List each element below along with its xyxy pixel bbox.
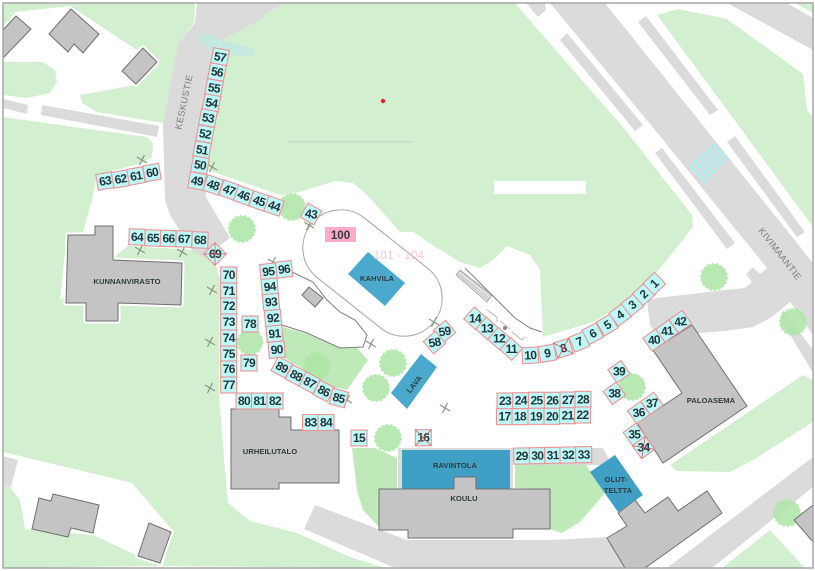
stall row 83-84	[302, 414, 334, 430]
stall 13: 13	[481, 322, 494, 336]
stall column 70-77	[221, 267, 237, 393]
stall 94: 94	[263, 279, 277, 294]
road name: Kivimaantie: KIVIMAANTIE	[756, 226, 804, 282]
tent: Olut-teltta: TELTTA	[604, 486, 633, 495]
stall 88: 88	[287, 367, 305, 385]
houses bottom left	[32, 494, 171, 563]
stall 2	[632, 283, 655, 306]
stall 26: 26	[546, 393, 559, 407]
stall 12: 12	[493, 332, 506, 346]
light posts	[135, 155, 450, 413]
pond	[198, 32, 255, 56]
stall 79: 79	[243, 356, 256, 370]
stall 49: 49	[190, 173, 205, 189]
stall 3: 3	[626, 297, 640, 312]
stall 90: 90	[270, 342, 284, 357]
stall 37: 37	[645, 396, 660, 411]
stall 9	[538, 344, 557, 363]
stall 43	[300, 202, 323, 226]
stall 96: 96	[277, 262, 292, 277]
stall 18: 18	[514, 410, 527, 424]
crossed stall 34: 34	[638, 440, 650, 454]
stall 100: 100	[331, 230, 350, 242]
building: Urheilutalo: URHEILUTALO	[243, 447, 297, 456]
stall 76: 76	[223, 362, 236, 376]
building: Koulu	[379, 477, 550, 538]
tent: Ravintola	[402, 450, 510, 490]
stall row 57-49	[188, 48, 229, 190]
stall 43: 43	[304, 206, 319, 222]
building: Kunnanvirasto: KUNNANVIRASTO	[93, 277, 161, 286]
stall 57: 57	[213, 49, 228, 65]
stall 93: 93	[264, 294, 279, 309]
stalls 78-79	[241, 316, 258, 371]
bench stand	[456, 270, 492, 302]
stall row 48-44	[203, 175, 284, 216]
stall 77: 77	[223, 378, 236, 392]
stall row 40-42	[642, 309, 694, 353]
stall 61: 61	[129, 168, 144, 184]
stall 22: 22	[577, 408, 589, 422]
stall 21: 21	[562, 409, 574, 423]
stall 66: 66	[162, 231, 176, 246]
stall 71: 71	[223, 284, 236, 298]
stall 33: 33	[578, 448, 591, 462]
stall 70: 70	[223, 268, 236, 282]
stall 4: 4	[613, 307, 627, 322]
stall 52: 52	[198, 126, 213, 142]
stall 2: 2	[637, 286, 651, 302]
stall 59: 59	[437, 323, 453, 339]
stall row 14-11	[462, 305, 525, 362]
stall 56	[208, 63, 226, 81]
stall 63: 63	[98, 173, 113, 189]
stall row 64-68	[129, 229, 208, 248]
stall 82: 82	[269, 394, 282, 408]
stall 30: 30	[531, 449, 544, 463]
stall 64: 64	[131, 230, 144, 244]
stall 28: 28	[577, 392, 590, 406]
tent: Olut-teltta	[590, 455, 643, 512]
stall 87: 87	[301, 374, 319, 392]
stall 67: 67	[178, 232, 191, 246]
stall 36: 36	[632, 405, 646, 420]
tent: Ravintola: RAVINTOLA	[433, 461, 477, 470]
stall 38: 38	[608, 386, 621, 400]
stall 85: 85	[331, 390, 347, 407]
building: Paloasema	[637, 325, 747, 463]
stall 44: 44	[266, 197, 283, 215]
stall row 80-82	[236, 393, 283, 409]
crossed stall 16	[415, 430, 431, 446]
stall 20: 20	[546, 409, 559, 423]
stall 68: 68	[194, 233, 207, 247]
stall 80: 80	[238, 394, 251, 408]
stall 5: 5	[601, 317, 614, 333]
house halos	[3, 16, 182, 563]
crossed stall 16: 16	[417, 431, 430, 445]
stall 55	[205, 79, 223, 97]
stall 42: 42	[674, 314, 688, 329]
stalls 59-58	[422, 318, 458, 355]
stall 15: 15	[353, 431, 366, 445]
stall 45: 45	[251, 192, 268, 210]
stall 92: 92	[266, 310, 281, 325]
stall 89: 89	[273, 358, 291, 377]
field marker	[288, 99, 412, 142]
crossed stall 8: 8	[558, 340, 569, 356]
houses top left	[3, 9, 157, 84]
stall row 89-85	[271, 357, 348, 408]
stall 10	[522, 347, 539, 364]
building: Urheilutalo	[231, 409, 339, 489]
stall 41: 41	[660, 323, 675, 339]
stall 7: 7	[574, 334, 586, 349]
stall 35: 35	[628, 427, 641, 441]
stall 15	[351, 430, 367, 446]
stall 9: 9	[543, 346, 552, 361]
stall 84: 84	[320, 416, 333, 430]
stall 3	[621, 294, 644, 316]
stall 55: 55	[207, 80, 222, 96]
stall 31: 31	[547, 448, 560, 462]
stall curve 10-1	[522, 272, 666, 364]
stall 40: 40	[647, 332, 662, 348]
crossed stall 8	[553, 338, 573, 358]
stall 50	[191, 156, 209, 174]
tent: Olut-teltta: OLUT-	[604, 475, 628, 484]
stalls 36-37	[626, 390, 665, 426]
stall 17: 17	[499, 410, 511, 424]
stall 57	[211, 48, 229, 66]
stall row 63-60	[96, 163, 161, 190]
building: Paloasema: PALOASEMA	[687, 396, 736, 405]
stage: Lava	[391, 354, 437, 409]
stall row 29-33	[514, 447, 592, 464]
stall 23: 23	[499, 394, 512, 408]
stall 6: 6	[587, 326, 600, 341]
building: Kunnanvirasto	[66, 226, 182, 321]
building: bottom right	[607, 491, 722, 568]
stall 24: 24	[515, 394, 528, 408]
path outline	[282, 272, 367, 348]
racetrack	[302, 209, 443, 337]
stall 81: 81	[254, 394, 266, 408]
stall 27: 27	[562, 393, 575, 407]
crossed stall 69	[202, 241, 229, 267]
stall 14: 14	[469, 311, 482, 325]
stall 100	[325, 227, 356, 242]
stall 65: 65	[147, 231, 160, 245]
stall 48: 48	[205, 176, 222, 194]
stall 25: 25	[531, 393, 543, 407]
stall 58: 58	[427, 334, 443, 350]
stall 32: 32	[562, 448, 575, 462]
stall 60: 60	[145, 164, 160, 180]
stall 62: 62	[113, 171, 129, 187]
stall 39: 39	[613, 365, 626, 379]
stall 95: 95	[262, 264, 276, 279]
stage: Lava: LAVA	[405, 373, 424, 395]
stall 72: 72	[223, 299, 236, 313]
building: Koulu: KOULU	[450, 494, 478, 503]
crossed stall 69: 69	[209, 247, 222, 261]
stall 5	[596, 314, 618, 336]
stall 51	[193, 141, 211, 159]
stall 46: 46	[236, 187, 252, 204]
stall 10: 10	[524, 348, 538, 363]
stall 53	[199, 109, 217, 127]
fence line	[465, 268, 542, 332]
trees	[229, 194, 806, 526]
tent: Kahvila: KAHVILA	[360, 274, 395, 283]
stall 1: 1	[647, 276, 662, 291]
stall 29: 29	[516, 449, 529, 463]
stalls 101-104 label: 101 - 104	[374, 250, 425, 262]
fence posts	[487, 310, 525, 340]
small shed	[302, 287, 323, 307]
stall 11: 11	[506, 342, 518, 356]
stall 7	[569, 331, 590, 352]
stall 74: 74	[223, 331, 236, 345]
stall 1	[643, 272, 666, 295]
stall 56: 56	[210, 64, 225, 80]
road name: Keskustie: KESKUSTIE	[173, 74, 195, 130]
stall 83: 83	[305, 416, 317, 430]
stall 54	[202, 94, 221, 112]
stall 73: 73	[223, 315, 236, 329]
stall column 96-90	[260, 261, 293, 358]
stall 53: 53	[201, 110, 216, 126]
stall 4	[609, 304, 631, 326]
stall block 17-28	[496, 391, 591, 425]
stall 54: 54	[204, 95, 220, 111]
stall 78: 78	[244, 317, 257, 331]
stall 86: 86	[315, 382, 333, 400]
building: right edge	[794, 505, 813, 542]
tent: Kahvila	[348, 252, 405, 306]
stall 52	[196, 125, 214, 143]
stall 6	[582, 323, 604, 345]
stall 49	[188, 172, 206, 190]
pedestrian crossing	[690, 144, 727, 182]
stall 47: 47	[221, 181, 238, 199]
stalls 39-38	[602, 359, 633, 406]
stall 19: 19	[530, 409, 543, 423]
stall 75: 75	[223, 347, 236, 361]
stall 50: 50	[193, 157, 208, 173]
stall 51: 51	[195, 142, 210, 158]
stall 91: 91	[268, 326, 282, 341]
stalls 35-34	[622, 421, 657, 461]
